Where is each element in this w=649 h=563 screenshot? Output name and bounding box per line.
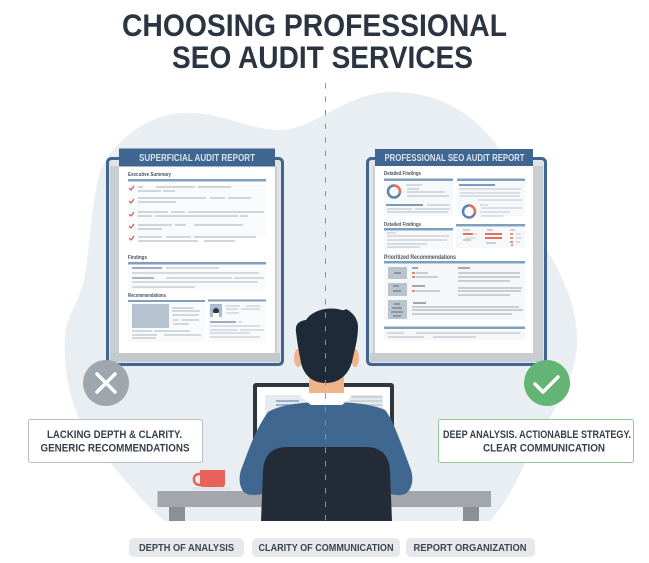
- pill: depth of analysis: [129, 538, 244, 557]
- report header: [119, 148, 275, 166]
- laptop: [253, 383, 394, 443]
- ears: [294, 349, 302, 367]
- title: [122, 7, 507, 75]
- center divider: [324, 83, 326, 521]
- section: executive summary: Executive Summary: [128, 172, 171, 178]
- chair: [261, 447, 392, 521]
- section: detailed findings top: Detailed Findings: [384, 171, 421, 177]
- title: CHOOSING PROFESSIONAL: [122, 7, 507, 43]
- gauge chart: [463, 206, 475, 218]
- report page: [110, 160, 280, 362]
- section: recommendations: Recommendations: [128, 293, 166, 299]
- title: SEO AUDIT SERVICES: [172, 39, 473, 75]
- report header: [375, 149, 533, 166]
- panel: superficial audit report: [108, 148, 282, 364]
- shirt collar: [300, 393, 352, 405]
- hair: [296, 308, 358, 383]
- red check marks: [129, 186, 134, 240]
- pill: report organization: [406, 538, 535, 557]
- person at desk: [240, 308, 412, 521]
- pill: depth of analysis: DEPTH OF ANALYSIS: [139, 542, 234, 554]
- report page: [370, 160, 543, 362]
- mini tables: [463, 230, 522, 245]
- callout: superficial verdict: [28, 420, 202, 462]
- report header: SUPERFICIAL AUDIT REPORT: [139, 153, 255, 164]
- neck: [309, 375, 344, 395]
- donut chart: [388, 186, 400, 198]
- pill: clarity of communication: [252, 538, 400, 557]
- callout: superficial verdict: LACKING DEPTH & CLARITY.: [47, 429, 182, 441]
- sweater: [240, 402, 412, 495]
- section: detailed findings top: [384, 171, 525, 218]
- callout: superficial verdict: GENERIC RECOMMENDATIONS: [40, 442, 190, 454]
- portrait thumbnail: [210, 304, 222, 317]
- section: prioritized recommendations: Prioritized Recommendations: [384, 254, 456, 261]
- pill: report organization: REPORT ORGANIZATION: [414, 542, 526, 554]
- panel: professional seo audit report: [368, 149, 546, 364]
- icon: coffee cup: [192, 470, 231, 490]
- section: recommendations: [128, 293, 266, 342]
- icon: cross badge: [83, 360, 129, 406]
- priority tags: [388, 267, 407, 319]
- section: executive summary: [128, 172, 266, 241]
- report frame: [368, 158, 546, 364]
- image placeholder: [132, 304, 169, 328]
- pill: clarity of communication: CLARITY OF COMMUNICATION: [258, 542, 394, 554]
- callout: professional verdict: CLEAR COMMUNICATION: [483, 442, 605, 454]
- section: findings: Findings: [128, 255, 147, 261]
- section: detailed findings lower: Detailed Findings: [384, 222, 421, 228]
- icon: check badge: [524, 360, 570, 406]
- report frame: [108, 158, 282, 364]
- report header: PROFESSIONAL SEO AUDIT REPORT: [384, 153, 524, 164]
- desk: [158, 491, 491, 521]
- callout: professional verdict: [438, 420, 634, 462]
- section: findings: [128, 255, 266, 289]
- section: detailed findings lower: [384, 222, 525, 249]
- background blob: [65, 92, 577, 521]
- section: prioritized recommendations: [384, 254, 525, 340]
